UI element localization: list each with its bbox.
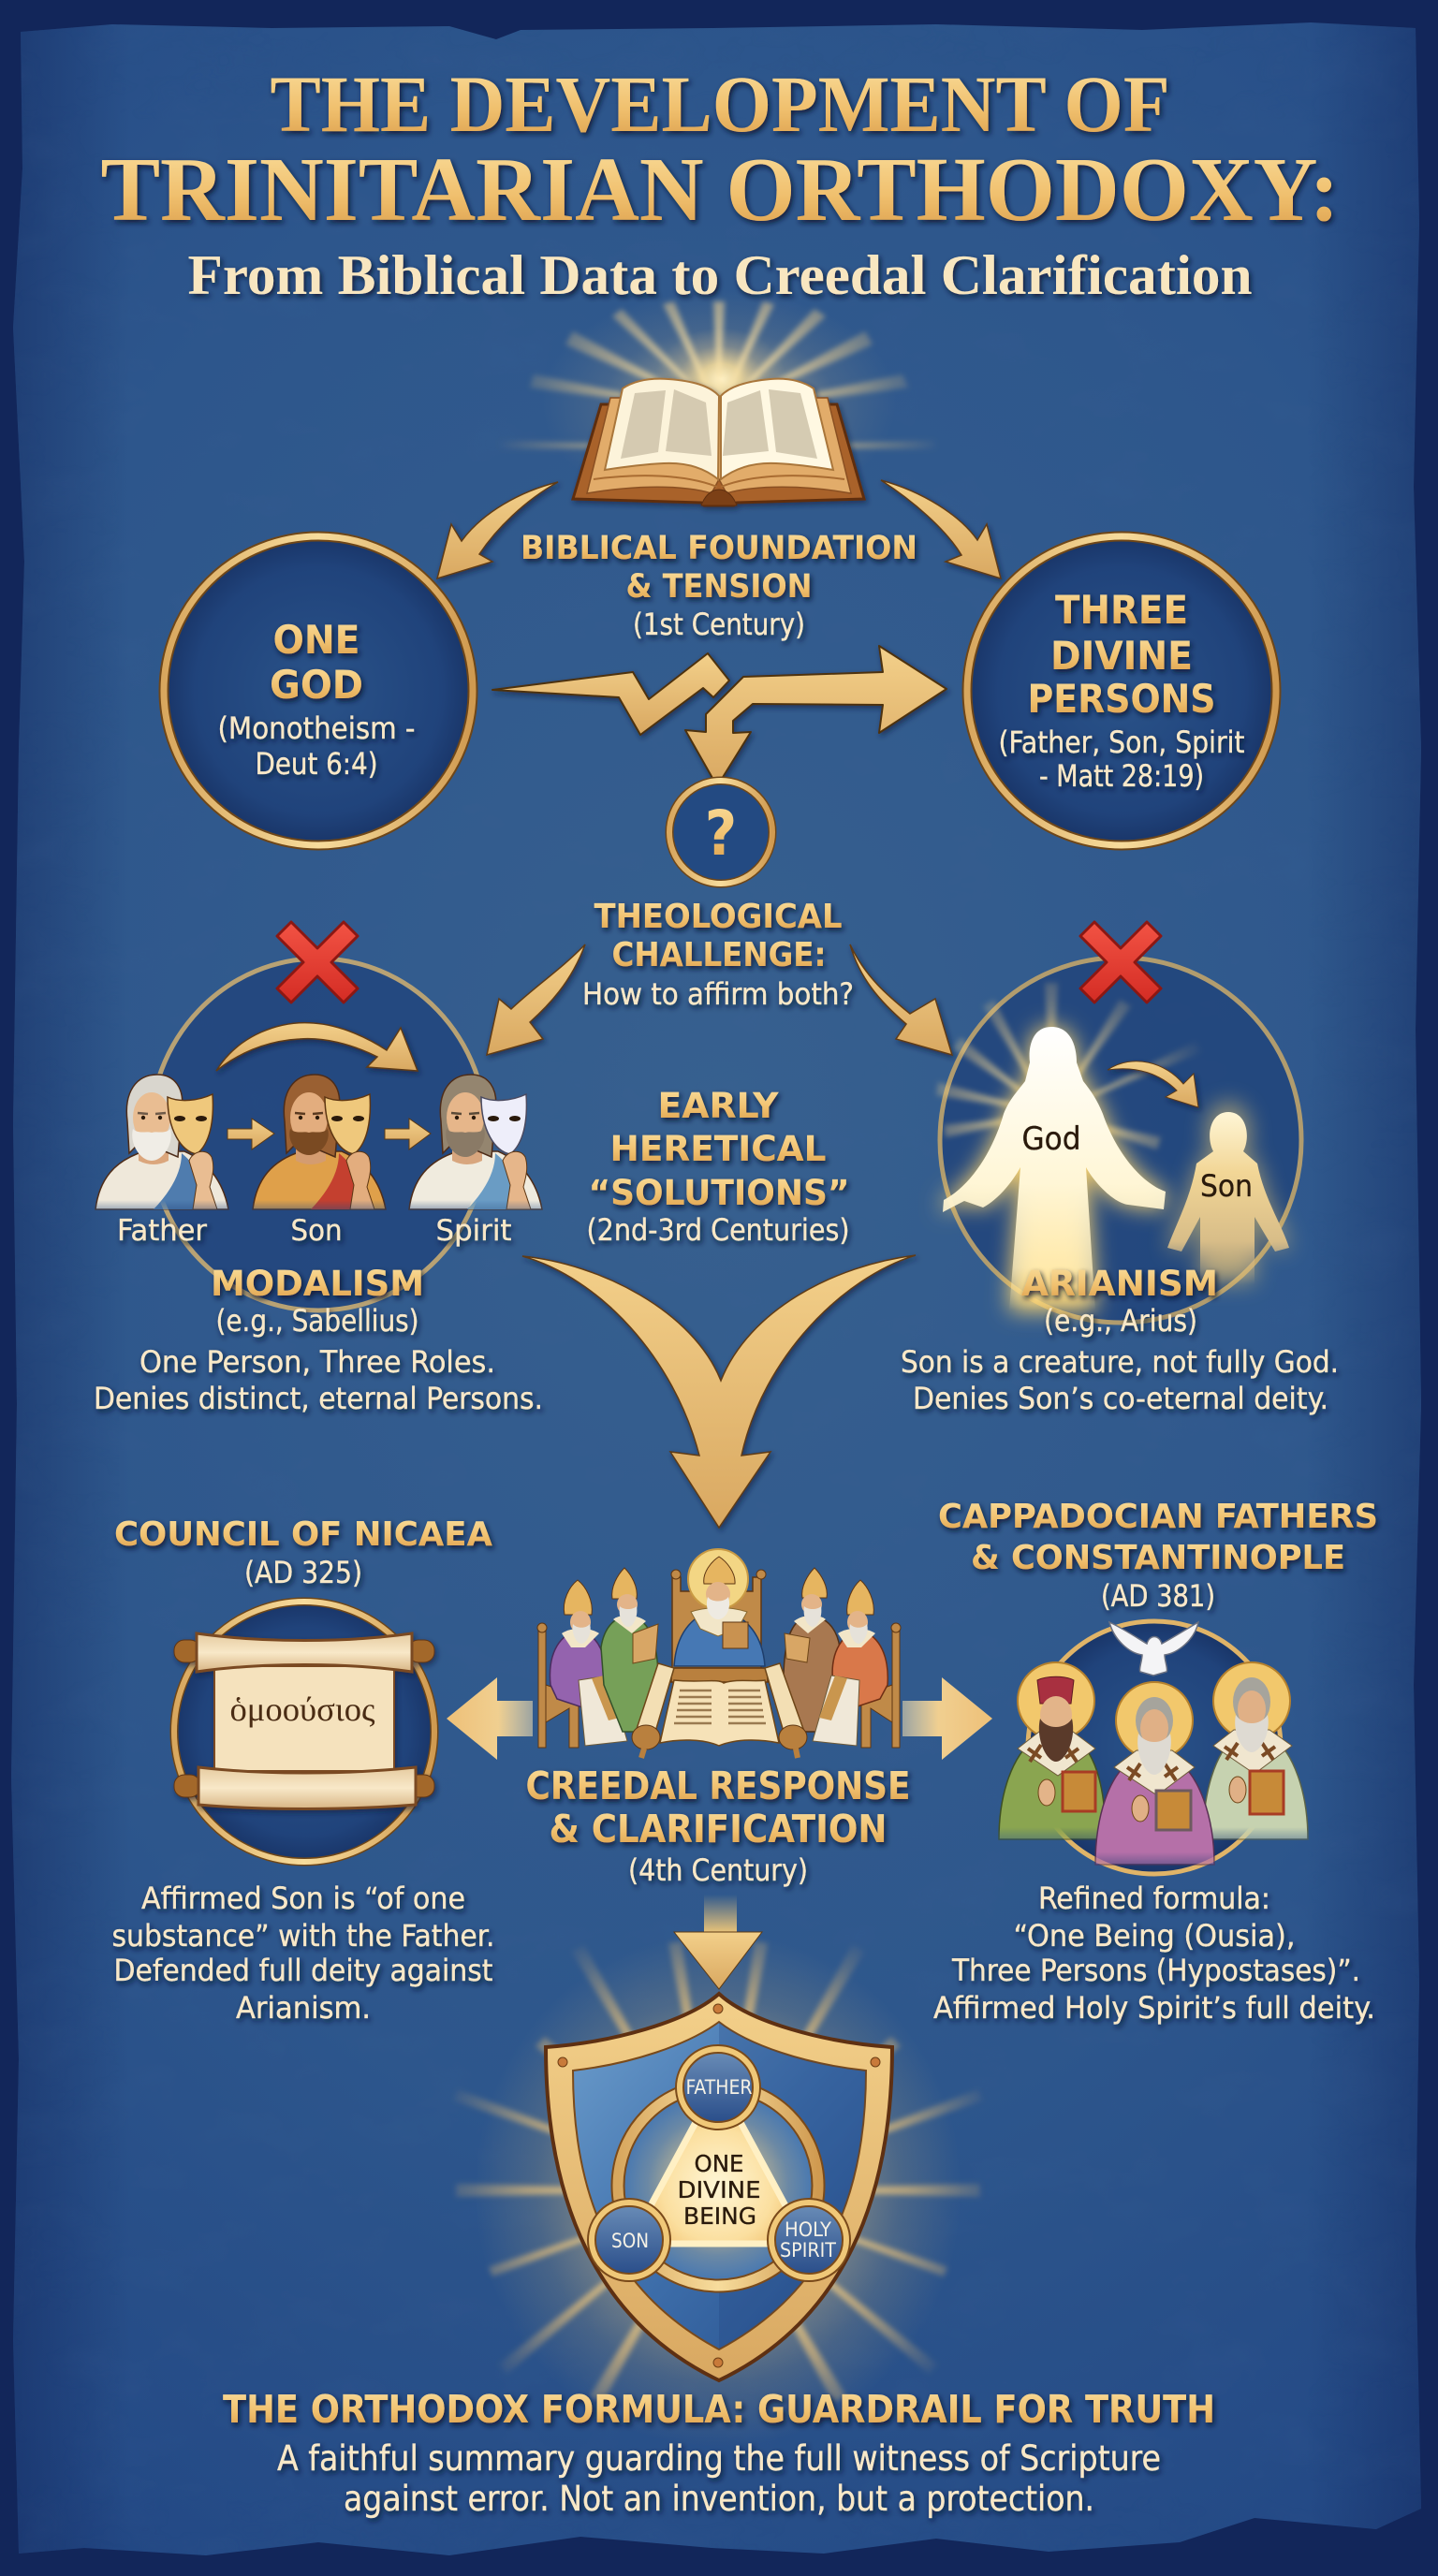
panel: Three Divine Persons circle: - Matt 28:19) — [1039, 758, 1204, 794]
heading: Cappadocian Fathers: CAPPADOCIAN FATHERS — [938, 1498, 1378, 1536]
title — [101, 59, 1339, 241]
icon: red X over modalism — [277, 922, 358, 1003]
node: Son — [592, 2203, 667, 2277]
label: One Divine Being: DIVINE — [678, 2176, 760, 2203]
far-right bishop and chair — [813, 1580, 901, 1748]
heading: council of nicaea — [114, 1515, 492, 1590]
council table bar — [671, 1668, 768, 1682]
heading: Cappadocian Fathers: & CONSTANTINOPLE — [971, 1539, 1345, 1577]
label: homoousios: ὁμοούσιος — [230, 1690, 374, 1728]
text block: Nicaea description: Affirmed Son is “of one — [141, 1881, 465, 1916]
panel: Three Divine Persons circle: DIVINE — [1050, 633, 1193, 679]
text block: arianism: ARIANISM — [1021, 1264, 1218, 1304]
text block: arianism: (e.g., Arius) — [1044, 1303, 1197, 1339]
text block: Cappadocian description: “One Being (Ousia), — [1013, 1918, 1296, 1954]
text block: Cappadocian description: Refined formula: — [1038, 1881, 1270, 1916]
son glow — [1167, 1103, 1289, 1282]
text block: closing summary: A faithful summary guarding the full witness of Scripture — [277, 2438, 1161, 2479]
label: God: God — [1022, 1120, 1080, 1158]
figure: left saint — [999, 1662, 1106, 1839]
right page — [721, 379, 833, 479]
shield blue field — [573, 2022, 866, 2349]
icon: shield with Trinity diagram: SON — [611, 2230, 649, 2252]
arrow: curved role change — [216, 1023, 418, 1071]
central glow — [624, 2092, 812, 2279]
heading: early heretical solutions: (2nd-3rd Centuries) — [586, 1212, 850, 1248]
god rays — [936, 983, 1202, 1149]
text block: Nicaea description — [112, 1881, 494, 2026]
label: One Divine Being: ONE — [695, 2150, 743, 2177]
far-left bishop and chair — [537, 1580, 627, 1748]
shield glow rays — [453, 1933, 983, 2448]
arrow: challenge to modalism — [487, 944, 585, 1055]
second-right bishop — [784, 1568, 840, 1732]
heading: biblical foundation — [521, 530, 917, 642]
heading: creedal response: CREEDAL RESPONSE — [526, 1764, 910, 1808]
book cover — [573, 404, 864, 505]
heading: biblical foundation: BIBLICAL FOUNDATION — [521, 530, 917, 567]
labels: father son spirit: Father — [117, 1214, 208, 1248]
arrow: council to Constantinople — [902, 1677, 992, 1760]
labels: father son spirit — [117, 1214, 512, 1248]
arrow: challenge to arianism — [850, 944, 952, 1055]
text block: arianism: Denies Son’s co-eternal deity. — [913, 1381, 1328, 1416]
panel: Three Divine Persons circle — [967, 536, 1276, 845]
heading: theological challenge — [582, 898, 854, 1012]
icon: shield with Trinity diagram: HOLY — [785, 2218, 831, 2241]
title: THE DEVELOPMENT OF — [270, 59, 1170, 149]
open scroll — [632, 1663, 807, 1758]
text block: Nicaea description: Arianism. — [236, 1990, 371, 2026]
arrow: son to spirit — [385, 1119, 431, 1149]
text block: arianism — [901, 1264, 1339, 1416]
panel: modalism illustration — [95, 959, 542, 1310]
panel: Three Divine Persons circle: PERSONS — [1028, 676, 1215, 722]
icon: shield with Trinity diagram — [546, 1994, 892, 2380]
figure: Spirit with mask — [409, 1075, 542, 1209]
central bishop — [674, 1557, 765, 1666]
shield frame — [546, 1994, 892, 2380]
arrow: father to son — [227, 1119, 274, 1149]
label: Son: Son — [1200, 1168, 1253, 1204]
heading: early heretical solutions: “SOLUTIONS” — [588, 1173, 850, 1213]
second-left bishop — [601, 1568, 658, 1732]
label: One Divine Being: BEING — [683, 2203, 756, 2230]
text block: closing summary: against error. Not an invention, but a protection. — [344, 2479, 1094, 2519]
panel: Three Divine Persons circle: (Father, Son, Spirit — [998, 724, 1245, 760]
heading: biblical foundation: (1st Century) — [633, 607, 805, 642]
icon: question mark circle: ? — [705, 798, 737, 870]
text block: modalism: MODALISM — [211, 1264, 424, 1304]
panel: One God circle: ONE — [273, 617, 360, 663]
panel: arianism illustration — [936, 958, 1301, 1323]
text block: Nicaea description: Defended full deity against — [114, 1953, 492, 1988]
heading: Cappadocian Fathers — [938, 1498, 1378, 1614]
labels: father son spirit: Spirit — [436, 1214, 512, 1248]
heading: theological challenge: THEOLOGICAL — [594, 898, 843, 936]
node: Father — [680, 2049, 756, 2126]
text block: Cappadocian description: Affirmed Holy Spirit’s full deity. — [933, 1990, 1375, 2026]
central triangle — [630, 2081, 806, 2244]
arrow: council to Nicaea — [447, 1677, 533, 1760]
icon: red X over arianism — [1080, 922, 1161, 1003]
heading: early heretical solutions: HERETICAL — [610, 1129, 826, 1169]
central throne and halo — [671, 1549, 766, 1668]
subtitle: From Biblical Data to Creedal Clarification — [187, 244, 1253, 306]
arrow: Bible to One God — [437, 482, 558, 578]
figure: Son with mask — [253, 1075, 386, 1209]
figure: centre saint — [1095, 1682, 1214, 1865]
arrow: creed down to shield — [674, 1895, 762, 1989]
text block: modalism — [94, 1264, 543, 1416]
page block — [587, 398, 851, 493]
rivets — [713, 2004, 723, 2013]
heading: orthodox formula: THE ORTHODOX FORMULA: GUARDRAIL FOR TRUTH — [223, 2387, 1215, 2432]
label: One Divine Being — [678, 2150, 760, 2230]
title: TRINITARIAN ORTHODOXY: — [101, 139, 1339, 241]
text block: Cappadocian description — [933, 1881, 1375, 2026]
figure: God silhouette — [943, 1027, 1166, 1310]
text block: Cappadocian description: Three Persons (Hypostases)”. — [951, 1953, 1360, 1988]
trinity ring — [618, 2086, 818, 2286]
heading: theological challenge: CHALLENGE: — [612, 936, 826, 974]
panel: One God circle: Deut 6:4) — [255, 746, 378, 782]
panel: Nicaea scroll circle — [174, 1602, 434, 1862]
panel: Three Divine Persons circle: THREE — [1055, 587, 1188, 633]
book glow and rays — [492, 290, 936, 515]
panel: Cappadocian Fathers circle — [999, 1621, 1308, 1874]
heading: creedal response — [526, 1764, 910, 1888]
heading: council of nicaea: (AD 325) — [244, 1555, 362, 1590]
icon: dove — [1109, 1622, 1198, 1676]
text columns — [621, 389, 817, 459]
figure: Son silhouette — [1167, 1112, 1289, 1284]
text block: closing summary — [277, 2438, 1161, 2519]
icon: question mark circle — [669, 781, 772, 884]
arrow: God to Son — [1108, 1061, 1198, 1107]
text block: modalism: (e.g., Sabellius) — [215, 1303, 419, 1339]
figure: right saint — [1203, 1662, 1308, 1839]
text block: Nicaea description: substance” with the Father. — [112, 1918, 494, 1954]
icon: shield with Trinity diagram: FATHER — [685, 2076, 753, 2099]
arrow: tension lightning bolt — [492, 646, 946, 786]
node: Holy Spirit — [771, 2203, 846, 2277]
heading: biblical foundation: & TENSION — [625, 568, 813, 606]
icon: shield with Trinity diagram: SPIRIT — [780, 2239, 836, 2261]
illustration: council of bishops — [537, 1549, 901, 1758]
panel: One God circle — [164, 536, 473, 845]
arrow: converging Y arrow — [522, 1255, 916, 1528]
panel: One God circle: (Monotheism - — [217, 710, 416, 746]
heading: theological challenge: How to affirm both? — [582, 976, 854, 1012]
heading: early heretical solutions — [586, 1086, 850, 1248]
icon: scroll — [174, 1633, 434, 1808]
icon: open Bible — [573, 379, 864, 505]
text block: modalism: One Person, Three Roles. — [139, 1344, 495, 1380]
book spine tab — [701, 490, 737, 505]
figure: Father with mask — [95, 1075, 228, 1209]
heading: Cappadocian Fathers: (AD 381) — [1101, 1578, 1215, 1614]
god glow — [943, 1027, 1166, 1310]
heading: early heretical solutions: EARLY — [657, 1086, 780, 1126]
arrow: Bible to Three Persons — [881, 480, 1001, 578]
left page — [605, 379, 719, 479]
labels: father son spirit: Son — [290, 1214, 343, 1248]
text block: arianism: Son is a creature, not fully God. — [901, 1344, 1339, 1380]
heading: creedal response: & CLARIFICATION — [549, 1807, 888, 1852]
panel: One God circle: GOD — [270, 662, 363, 708]
text block: modalism: Denies distinct, eternal Persons. — [94, 1381, 543, 1416]
heading: creedal response: (4th Century) — [628, 1852, 808, 1888]
heading: council of nicaea: COUNCIL OF NICAEA — [114, 1515, 492, 1554]
